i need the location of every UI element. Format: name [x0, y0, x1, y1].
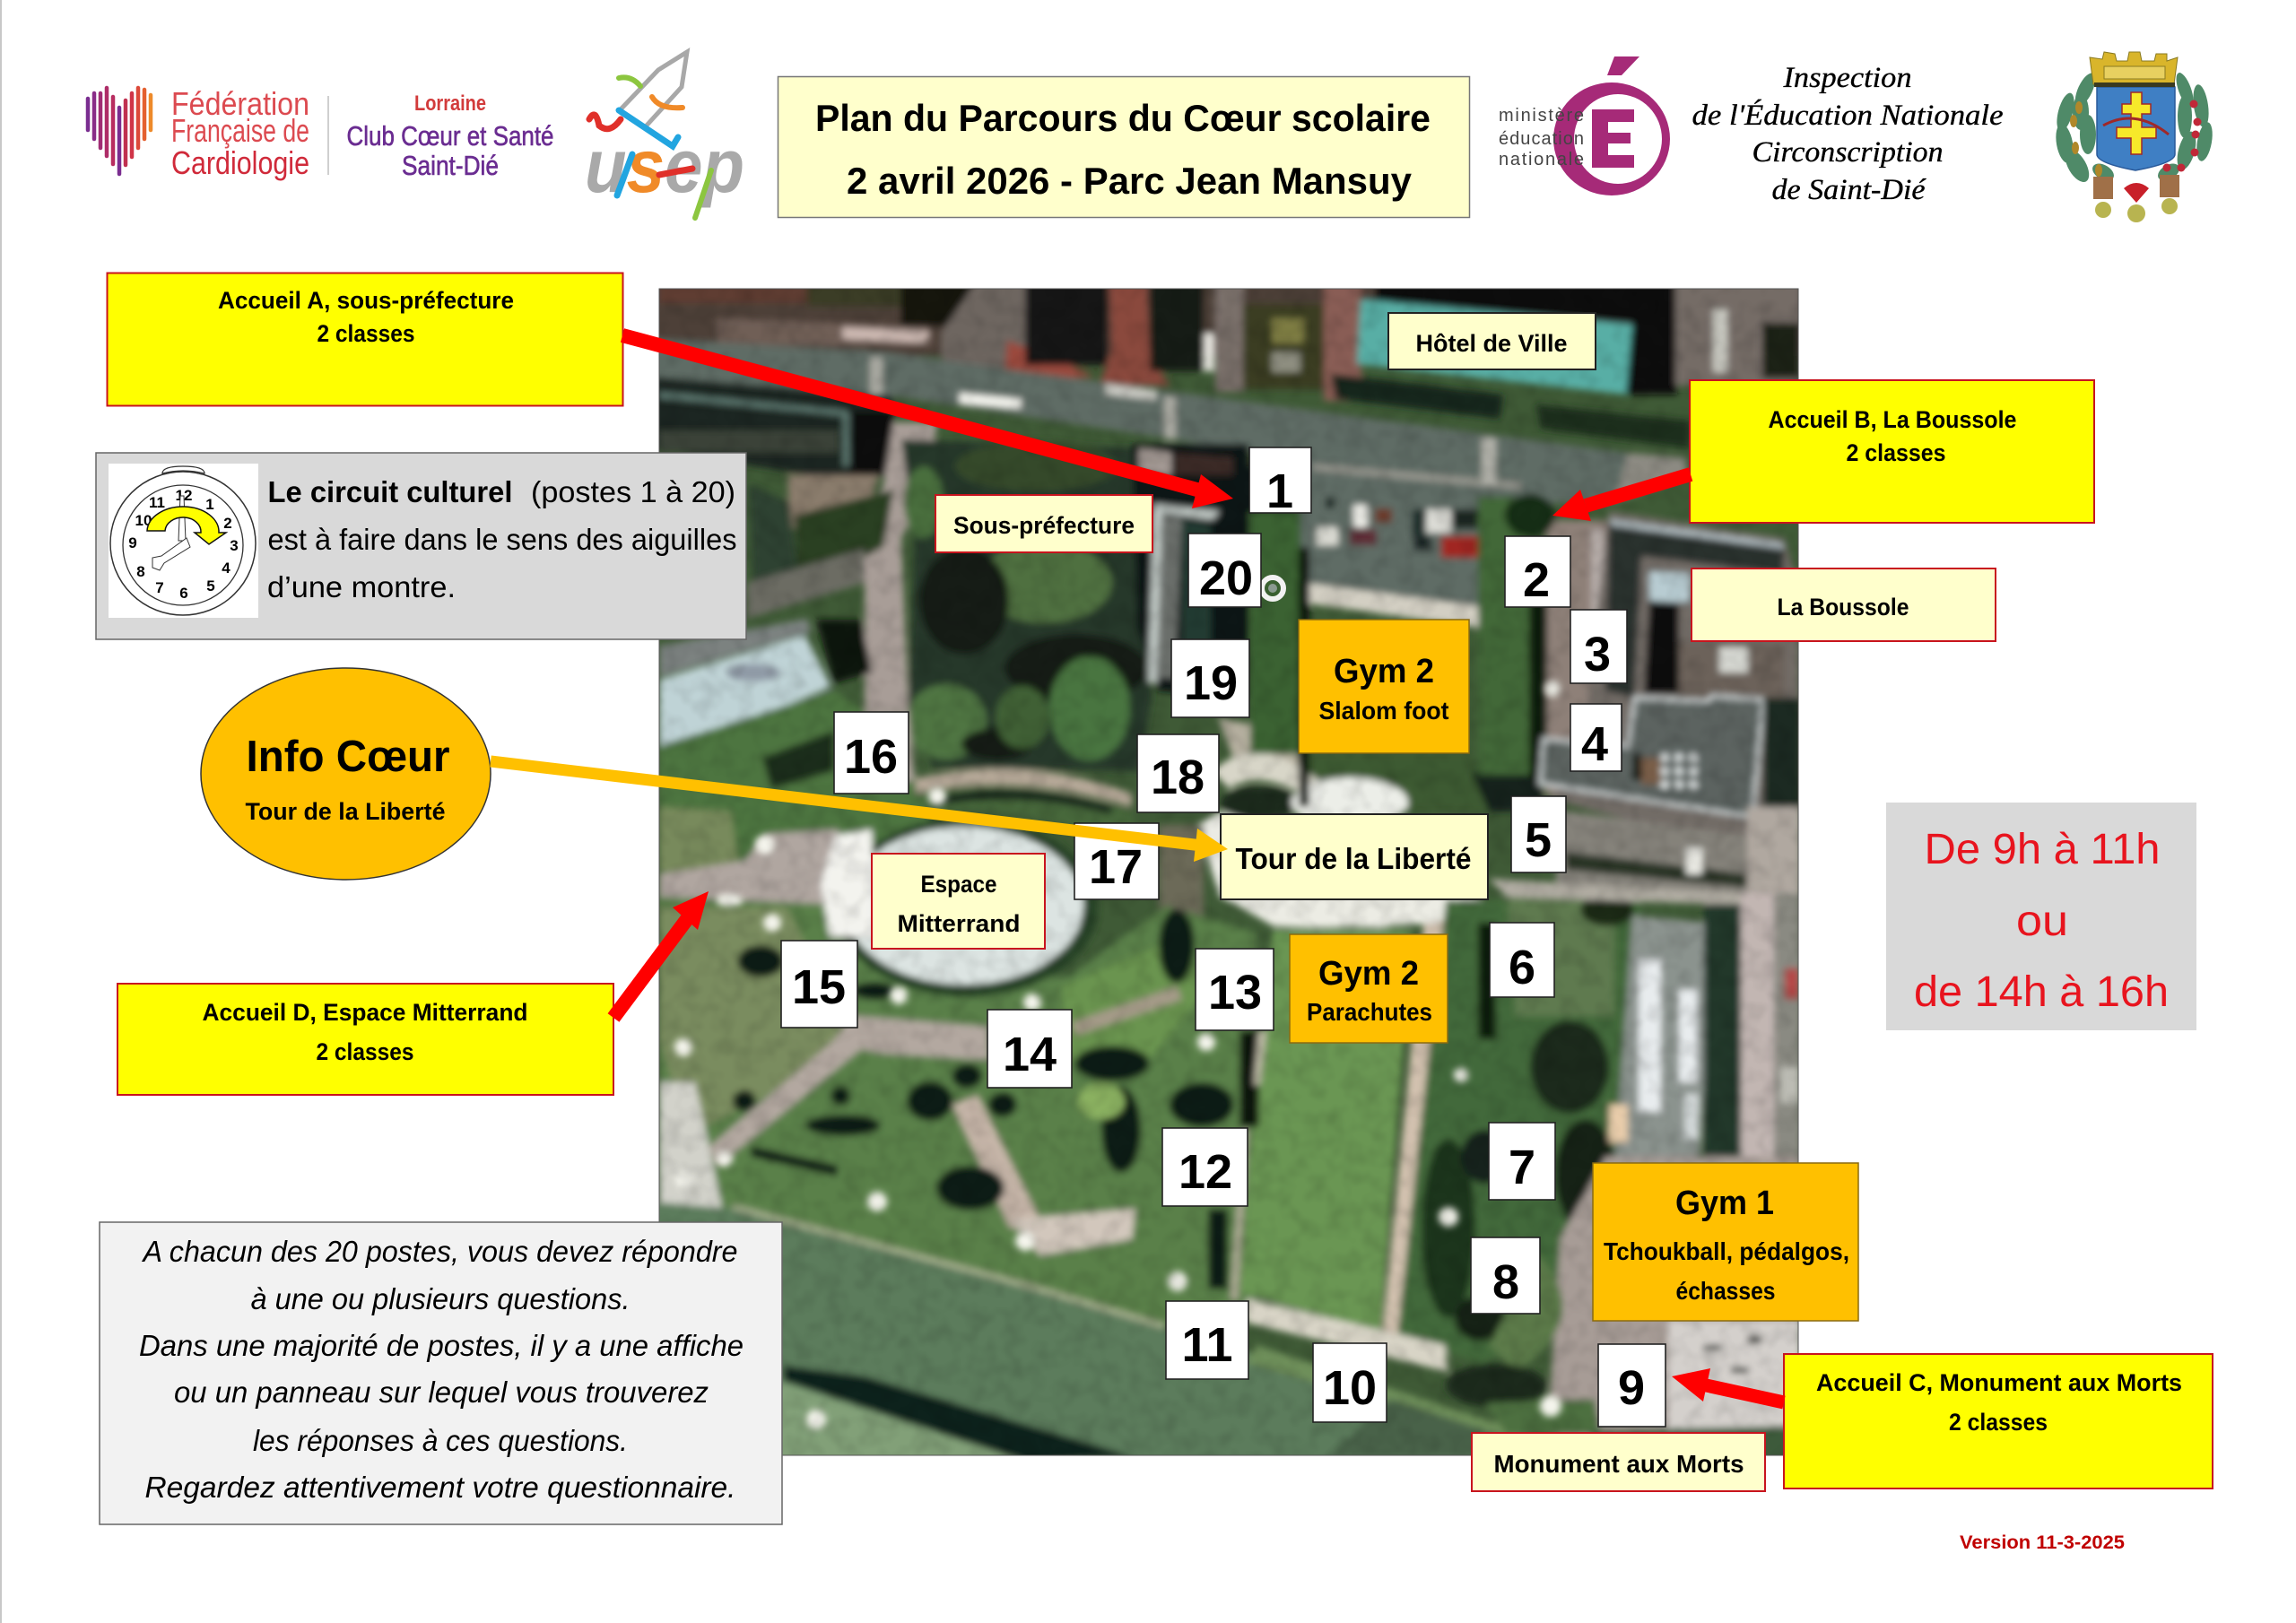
station 20 [1188, 534, 1261, 607]
panel: instructions: A chacun des 20 postes, vous devez répondre [142, 1235, 738, 1268]
label: Espace Mitterrand: Espace [920, 871, 997, 898]
map: pale plaza strip below parking [1302, 583, 1492, 629]
station 12: 12 [1178, 1145, 1232, 1199]
panel: instructions: ou un panneau sur lequel vous trouverez [174, 1376, 709, 1409]
box: Gym 2 Slalom foot: Slalom foot [1318, 697, 1449, 725]
station 10: 10 [1323, 1361, 1377, 1415]
station 9 [1598, 1344, 1665, 1427]
map: south-west park and lawns [659, 897, 1256, 1328]
label: La Boussole [1692, 568, 1996, 641]
station 2: 2 [1523, 553, 1550, 607]
station 11 [1166, 1301, 1248, 1379]
callout: Accueil A [108, 273, 622, 405]
map: Espace Mitterrand dome [821, 818, 1098, 997]
station 16: 16 [844, 730, 898, 784]
station 2 [1505, 536, 1570, 607]
map: round windows on roof [1660, 753, 1698, 789]
callout: Info Cœur ellipse: Tour de la Liberté [246, 798, 445, 825]
logo: Fédération Française de Cardiologie: Française de [171, 112, 309, 149]
callout: Accueil B: Accueil B, La Boussole [1769, 406, 2016, 433]
map: plaza west of dome [659, 829, 839, 906]
station 14 [987, 1010, 1072, 1088]
box: Gym 1: Gym 1 [1675, 1185, 1774, 1222]
station 8 [1471, 1237, 1540, 1314]
arrow: Info Cœur to Tour de la Liberté [491, 761, 1228, 862]
callout: Accueil C [1784, 1354, 2213, 1488]
text: Inspection de l'Éducation Nationale: de l'Éducation Nationale [1692, 99, 2004, 132]
icon: clock with clockwise arrow: 9 [128, 534, 137, 551]
station 11: 11 [1181, 1318, 1233, 1372]
callout: Info Cœur ellipse [201, 668, 491, 880]
box: Gym 2 Slalom foot: Gym 2 [1334, 653, 1434, 690]
logo: Fédération Française de Cardiologie: Cardiologie [171, 144, 309, 181]
callout: Accueil A: Accueil A, sous-préfecture [218, 287, 514, 314]
logo: Fédération Française de Cardiologie: Fédération [171, 85, 309, 122]
icon: clock with clockwise arrow: 10 [135, 512, 152, 529]
map: garden south-west [659, 690, 933, 879]
label: Sous-préfecture: Sous-préfecture [953, 512, 1135, 539]
map: parked cars [1317, 498, 1491, 558]
map: river [650, 1202, 1614, 1471]
map: service road east [1489, 807, 1801, 907]
icon: clock with clockwise arrow: 8 [136, 563, 145, 580]
station 18: 18 [1151, 751, 1205, 804]
station 15 [781, 941, 857, 1028]
station 17: 17 [1089, 840, 1143, 894]
box: Gym 2 Parachutes: Parachutes [1307, 998, 1432, 1026]
station 14: 14 [1003, 1028, 1057, 1081]
label: Hôtel de Ville [1388, 313, 1596, 369]
station 17 [1074, 823, 1159, 899]
panel: circuit culturel: Le circuit culturel [267, 475, 513, 508]
map: dark tree clusters [733, 908, 1234, 1289]
station 9: 9 [1618, 1361, 1645, 1415]
station 4: 4 [1581, 717, 1608, 771]
logo: ministère éducation nationale: éducation [1499, 129, 1584, 149]
version note: Version 11-3-2025 [1960, 1532, 2125, 1553]
callout: Accueil D [117, 984, 613, 1095]
box: Gym 2 Parachutes [1290, 934, 1448, 1043]
box: Gym 2 Parachutes: Gym 2 [1318, 955, 1419, 993]
label: Monument aux Morts [1472, 1433, 1765, 1491]
station 15: 15 [792, 960, 846, 1014]
station 12 [1162, 1128, 1248, 1206]
map: north-west dark roofs [650, 377, 894, 476]
logo: ministère éducation nationale [1499, 56, 1670, 195]
icon: clock with clockwise arrow: 3 [230, 537, 239, 554]
station 3: 3 [1584, 628, 1611, 681]
panel: instructions [100, 1222, 782, 1524]
station 3 [1570, 610, 1627, 683]
station 4 [1570, 704, 1622, 771]
icon: clock with clockwise arrow: 5 [206, 577, 215, 595]
logo: USEP: usep [585, 124, 744, 208]
callout: Accueil A: 2 classes [317, 320, 414, 347]
station 13 [1196, 949, 1274, 1030]
logo: Club Cœur et Santé: Lorraine [414, 91, 486, 116]
text: Inspection de l'Éducation Nationale: Inspection [1782, 62, 1912, 94]
panel: circuit culturel: est à faire dans le sens des aiguilles [267, 523, 737, 556]
panel: instructions: les réponses à ces questions. [253, 1424, 628, 1457]
box: Gym 1 [1593, 1163, 1858, 1321]
callout: Accueil B [1690, 380, 2094, 523]
station 5 [1511, 796, 1566, 872]
map: central lawn [1239, 930, 1412, 1333]
map: lamp posts and white spots [674, 681, 1561, 1429]
station 1 [1249, 447, 1311, 518]
station 19: 19 [1184, 656, 1238, 710]
station 1: 1 [1266, 464, 1293, 518]
title box: 2 avril 2026 - Parc Jean Mansuy [847, 160, 1413, 202]
station 16 [834, 712, 909, 794]
icon: clock with clockwise arrow: 4 [222, 560, 230, 577]
panel: instructions: Dans une majorité de postes, il y a une affiche [139, 1329, 744, 1362]
station 5: 5 [1525, 813, 1552, 867]
panel: instructions: Regardez attentivement votre questionnaire. [145, 1471, 735, 1504]
label: Sous-préfecture [935, 495, 1152, 552]
map: La Boussole building [1540, 511, 1801, 861]
icon: clock with clockwise arrow: 2 [223, 515, 232, 532]
map: tree columns [1248, 466, 1555, 807]
map: north buildings band [650, 280, 1807, 401]
station 6 [1490, 923, 1554, 997]
map: arc path north of dome [909, 762, 1136, 825]
icon: clock with clockwise arrow: 12 [176, 487, 192, 504]
logo: ministère éducation nationale: nationale [1499, 150, 1584, 169]
panel: schedule [1886, 803, 2196, 1030]
callout: Accueil D: 2 classes [316, 1038, 414, 1065]
map: east gardens [1397, 893, 1641, 1363]
text: Inspection de l'Éducation Nationale: de Saint-Dié [1772, 174, 1926, 206]
label: Espace Mitterrand [872, 854, 1045, 949]
station 7 [1489, 1123, 1555, 1200]
box: Gym 1: Tchoukball, pédalgos, [1604, 1237, 1849, 1265]
box: Gym 1: échasses [1675, 1277, 1776, 1305]
arrow: Accueil B to station 2 [1552, 474, 1691, 521]
station 10 [1313, 1343, 1387, 1422]
map: plaza north-east [1544, 520, 1610, 794]
station 13: 13 [1208, 966, 1262, 1020]
panel: circuit culturel [96, 453, 746, 639]
panel: instructions: à une ou plusieurs questions. [251, 1282, 630, 1315]
arrow: Accueil C to station 9 [1672, 1368, 1784, 1402]
station 20: 20 [1199, 551, 1253, 605]
box: Tour de la Liberté: Tour de la Liberté [1236, 842, 1471, 875]
map: white-blue building [659, 619, 872, 746]
logo: Club Cœur et Santé: Club Cœur et Santé [346, 120, 554, 152]
icon: clock with clockwise arrow: 11 [149, 494, 165, 511]
map: hedges [1331, 374, 1690, 448]
logo: ministère éducation nationale: ministère [1499, 106, 1584, 126]
arrow: Accueil D to Espace Mitterrand [613, 891, 709, 1018]
station 7: 7 [1509, 1141, 1535, 1194]
logo: Club Cœur et Santé [346, 91, 554, 181]
arrow: Accueil A to station 1 [622, 335, 1233, 508]
box: Tour de la Liberté [1221, 814, 1488, 899]
logo: Fédération Française de Cardiologie [88, 85, 329, 181]
station 8: 8 [1492, 1255, 1519, 1309]
callout: Info Cœur ellipse: Info Cœur [246, 733, 450, 781]
station 18 [1137, 734, 1219, 812]
label: La Boussole: La Boussole [1778, 594, 1909, 621]
text: Inspection de l'Éducation Nationale: Circonscription [1752, 136, 1943, 169]
map: central tree mass [901, 439, 1152, 771]
panel: circuit culturel: d’une montre. [267, 570, 456, 603]
label: Hôtel de Ville: Hôtel de Ville [1415, 330, 1568, 357]
title box [778, 77, 1469, 217]
panel: schedule: de 14h à 16h [1914, 968, 2169, 1016]
icon: target circle [1262, 577, 1283, 599]
station 19 [1171, 639, 1249, 717]
panel: schedule: De 9h à 11h [1925, 826, 2160, 873]
text: Inspection de l'Éducation Nationale [1692, 62, 2004, 206]
box: Gym 2 Slalom foot [1299, 620, 1469, 753]
callout: Accueil C: Accueil C, Monument aux Morts [1816, 1369, 2182, 1396]
map: light green patch [1078, 1083, 1125, 1119]
map: town hall teal roof [1357, 299, 1632, 395]
panel: schedule: ou [2016, 898, 2068, 945]
logo: USEP [585, 52, 744, 218]
map: east housing block [1609, 893, 1801, 1166]
panel: circuit culturel: (postes 1 à 20) [531, 475, 735, 508]
map: grey-beige lane [747, 422, 937, 708]
icon: clock with clockwise arrow [109, 464, 258, 618]
callout: Accueil B: 2 classes [1846, 439, 1946, 466]
callout: Accueil C: 2 classes [1949, 1409, 2048, 1436]
title box: Plan du Parcours du Cœur scolaire [815, 97, 1431, 139]
map: Tour de la Liberté plaza [1159, 717, 1543, 942]
map: Sous-préfecture building [1132, 444, 1248, 699]
label: Monument aux Morts: Monument aux Morts [1494, 1450, 1744, 1478]
logo: Club Cœur et Santé: Saint-Dié [402, 150, 499, 181]
icon: clock with clockwise arrow: 1 [205, 496, 214, 513]
icon: clock with clockwise arrow: 6 [179, 585, 188, 602]
map: dark strip and thin paths beside lawn [1229, 900, 1485, 1336]
map: Monument plaza [1489, 1157, 1801, 1457]
icon: coat of arms of Saint-Dié [2053, 52, 2215, 222]
callout: Accueil D: Accueil D, Espace Mitterrand [203, 999, 527, 1026]
label: Espace Mitterrand: Mitterrand [897, 910, 1021, 937]
map: main road and parking [650, 339, 1686, 614]
map: riverside path and shore [1247, 1298, 1801, 1462]
aerial map of the Parc Jean Mansuy [650, 280, 1807, 1471]
map: photo grain [659, 289, 1798, 1455]
station 6: 6 [1509, 941, 1535, 994]
icon: clock with clockwise arrow: 7 [155, 579, 164, 596]
